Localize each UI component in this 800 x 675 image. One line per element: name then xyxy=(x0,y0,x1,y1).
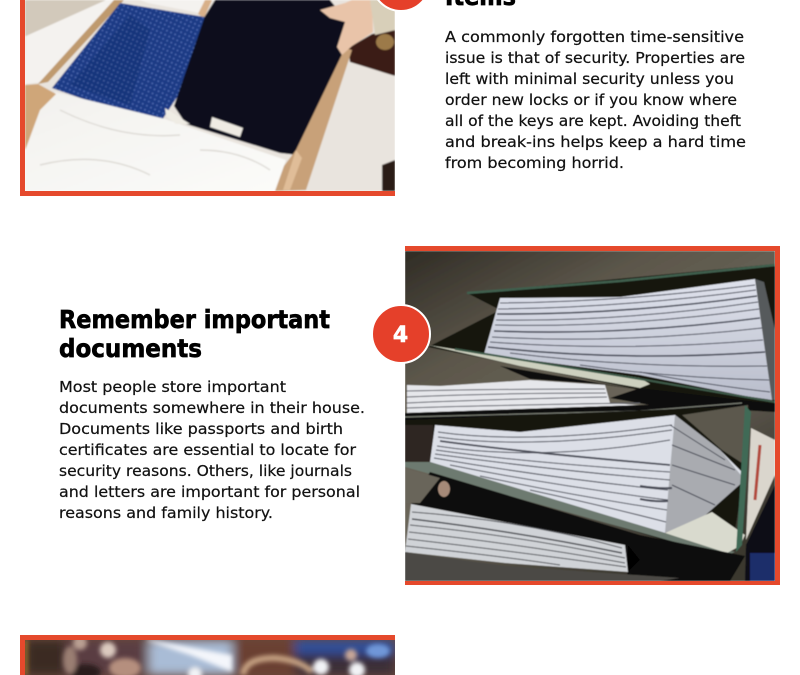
text block: security: from becoming horrid. xyxy=(445,154,624,172)
text block: security: order new locks or if you know where xyxy=(445,91,737,109)
text block: security: and break-ins helps keep a hard time xyxy=(445,133,746,151)
panel: blurred photo with frame xyxy=(20,635,395,675)
shadow under third stack xyxy=(411,472,745,581)
text block: security: A commonly forgotten time-sensitive xyxy=(445,28,744,46)
text block: security xyxy=(445,28,746,172)
third stack dark gap xyxy=(405,406,750,543)
text block: documents: certificates are essential to locate for xyxy=(59,441,357,459)
photo: clothes in a cardboard box xyxy=(25,0,395,191)
heading: remember important documents: documents xyxy=(59,334,202,363)
top binder xyxy=(428,264,775,405)
text block: security: left with minimal security unless you xyxy=(445,70,734,88)
step 4 number badge xyxy=(372,305,430,363)
panel: binders photo with frame xyxy=(405,246,780,585)
step 4 number badge: 4 xyxy=(393,323,408,348)
text block: security: all of the keys are kept. Avoiding theft xyxy=(445,112,741,130)
text block: documents: security reasons. Others, like journals xyxy=(59,462,352,480)
text block: security: issue is that of security. Properties are xyxy=(445,49,745,67)
text block: documents: and letters are important for personal xyxy=(59,483,360,501)
step 3 number badge xyxy=(372,0,430,11)
photo: stacked document binders xyxy=(405,251,775,581)
panel: packing box photo with frame xyxy=(20,0,395,196)
text block: documents xyxy=(59,378,365,522)
photo frame: bottom xyxy=(20,635,395,675)
text block: documents: Most people store important xyxy=(59,378,286,396)
photo frame: binders xyxy=(405,246,780,585)
text block: documents: reasons and family history. xyxy=(59,504,273,522)
text block: documents: Documents like passports and birth xyxy=(59,420,343,438)
photo frame: box xyxy=(20,0,395,196)
text block: documents: documents somewhere in their house. xyxy=(59,399,365,417)
heading: remember important documents xyxy=(59,305,330,363)
heading: remember important documents: Remember important xyxy=(59,305,330,334)
second stack xyxy=(407,380,640,413)
photo: blurred bokeh scene xyxy=(25,640,395,675)
bottom stack xyxy=(405,504,628,572)
